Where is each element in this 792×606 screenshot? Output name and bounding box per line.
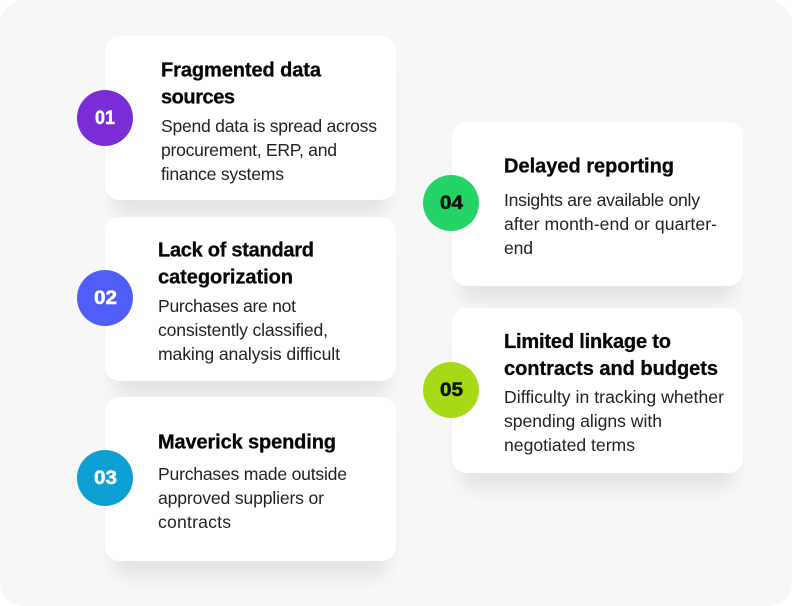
description 04: after month-end or quarter- [504, 214, 717, 234]
badge 05: 05 [440, 380, 463, 401]
description 05: negotiated terms [504, 435, 635, 455]
heading 01 [161, 60, 322, 108]
panel: card 02 lack of standard categorization [77, 217, 396, 381]
description 02: making analysis difficult [158, 344, 340, 364]
badge 04: 04 [440, 193, 463, 214]
description 01: procurement, ERP, and [161, 140, 337, 160]
description 01 [161, 116, 377, 184]
panel: card 03 maverick spending [77, 397, 396, 561]
heading 05 [504, 331, 718, 380]
badge 01: 01 [95, 108, 115, 129]
description 02 [158, 296, 340, 364]
heading 05: contracts and budgets [504, 358, 718, 380]
heading 02: Lack of standard [158, 240, 314, 262]
badge 02 [77, 270, 133, 326]
description 01: finance systems [161, 164, 284, 184]
panel: card 04 delayed reporting [423, 122, 743, 286]
heading 04: Delayed reporting [504, 156, 674, 178]
card background 01 [105, 36, 396, 200]
card background 02 [105, 217, 396, 381]
description 03 [158, 464, 347, 532]
panel: card 05 limited linkage [423, 308, 743, 473]
heading 01: sources [161, 86, 235, 108]
description 02: Purchases are not [158, 296, 296, 316]
card background 03 [105, 397, 396, 561]
badge 04 [423, 175, 479, 231]
description 05: spending aligns with [504, 411, 662, 431]
card shadows [113, 56, 735, 577]
panel: card 01 fragmented data sources [77, 36, 396, 200]
description 04: end [504, 238, 533, 258]
description 03: contracts [158, 512, 231, 532]
badge 01 [77, 90, 133, 146]
badge 03 [77, 450, 133, 506]
description 05: Difficulty in tracking whether [504, 387, 724, 407]
heading 05: Limited linkage to [504, 331, 671, 353]
heading 03: Maverick spending [158, 432, 336, 454]
description 03: Purchases made outside [158, 464, 347, 484]
description 04: Insights are available only [504, 190, 700, 210]
description 05 [504, 387, 724, 455]
badge 03: 03 [94, 468, 117, 489]
description 03: approved suppliers or [158, 488, 324, 508]
description 01: Spend data is spread across [161, 116, 377, 136]
badge 05 [423, 362, 479, 418]
heading 02 [158, 240, 314, 288]
heading 01: Fragmented data [161, 60, 322, 82]
badge 02: 02 [94, 288, 117, 309]
description 02: consistently classified, [158, 320, 328, 340]
heading 02: categorization [158, 266, 293, 288]
description 04 [504, 190, 717, 258]
card background 04 [452, 122, 743, 286]
card background 05 [452, 308, 743, 473]
